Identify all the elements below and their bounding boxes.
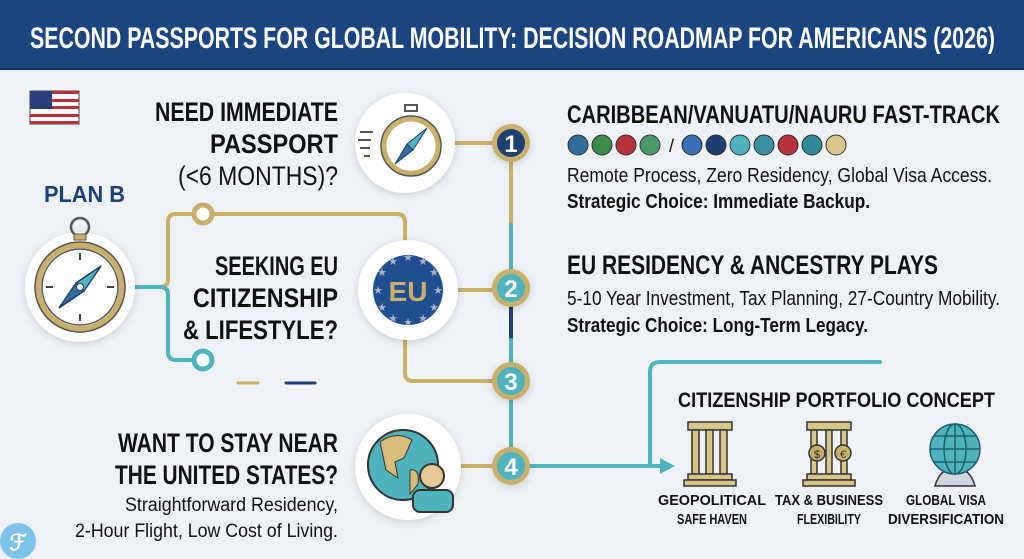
question 1 text: (<6 MONTHS)?	[178, 161, 338, 191]
node 2	[492, 269, 530, 307]
option 1 text block	[567, 101, 1000, 213]
node 1: 1	[504, 131, 518, 158]
portfolio labels: SAFE HAVEN	[677, 511, 747, 528]
node 3: 3	[504, 369, 518, 396]
icon: EU: ★	[403, 252, 413, 264]
portfolio panel	[658, 389, 1004, 528]
icon: EU: ★	[429, 267, 439, 279]
arrow: to portfolio	[660, 458, 675, 474]
icon: tax pillars: €	[840, 449, 846, 461]
question 2 text: & LIFESTYLE?	[183, 315, 338, 345]
option 1 text block: Strategic Choice: Immediate Backup.	[567, 191, 870, 213]
portfolio labels: DIVERSIFICATION	[888, 511, 1004, 528]
roadmap connector lines	[135, 143, 880, 466]
portfolio labels: TAX & BUSINESS	[775, 492, 883, 509]
node 4	[492, 447, 530, 485]
icon: pillars	[684, 422, 736, 486]
icon: tax pillars	[803, 422, 855, 486]
icon: US flag	[30, 91, 79, 124]
logo	[0, 523, 36, 559]
flags row	[568, 135, 846, 155]
icon: compass	[25, 218, 135, 342]
node 4: 4	[504, 454, 518, 481]
node 1	[492, 124, 530, 162]
icon: EU: ★	[388, 313, 398, 325]
icon: EU	[358, 240, 458, 340]
icon: globe with person	[355, 414, 461, 520]
question 3 text: 2-Hour Flight, Low Cost of Living.	[75, 521, 338, 542]
portfolio labels	[658, 492, 1004, 528]
portfolio labels: FLEXIBILITY	[797, 511, 861, 528]
question 1 text	[155, 97, 338, 191]
icon: EU: ★	[377, 302, 387, 314]
question 3 text: THE UNITED STATES?	[115, 460, 338, 490]
icon: EU: ★	[403, 317, 413, 329]
header bar	[0, 0, 1024, 70]
portfolio labels: GLOBAL VISA	[906, 492, 986, 509]
question 3 text: Straightforward Residency,	[125, 495, 338, 516]
PLAN B label: PLAN B	[44, 181, 125, 207]
icon: EU: EU	[389, 276, 427, 307]
node 2: 2	[504, 276, 518, 303]
question 3 text	[75, 428, 338, 542]
option 2 text block: Strategic Choice: Long-Term Legacy.	[567, 315, 868, 337]
question 3 text: WANT TO STAY NEAR	[118, 428, 338, 458]
question 2 text	[183, 251, 338, 345]
icon: EU: ★	[429, 302, 439, 314]
node 3	[492, 362, 530, 400]
icon: stopwatch	[355, 93, 455, 193]
question 1 text: NEED IMMEDIATE	[155, 97, 338, 127]
question 2 text: CITIZENSHIP	[193, 283, 338, 313]
icon: EU: ★	[373, 285, 383, 297]
branch ring teal	[194, 351, 212, 369]
icon: tax pillars: $	[814, 449, 820, 461]
branch ring gold	[194, 205, 212, 223]
icon: EU: ★	[388, 256, 398, 268]
icon: EU: ★	[377, 267, 387, 279]
portfolio labels: GEOPOLITICAL	[658, 492, 766, 509]
logo: ℱ	[9, 530, 27, 555]
option 1 text block: /	[669, 136, 674, 156]
question 1 text: PASSPORT	[210, 129, 338, 159]
icon: EU: ★	[418, 256, 428, 268]
option 2 text block	[567, 250, 1000, 337]
question 2 text: SEEKING EU	[215, 251, 338, 281]
icon: EU: ★	[433, 285, 443, 297]
icon: globe	[930, 424, 980, 486]
icon: EU: ★	[418, 313, 428, 325]
